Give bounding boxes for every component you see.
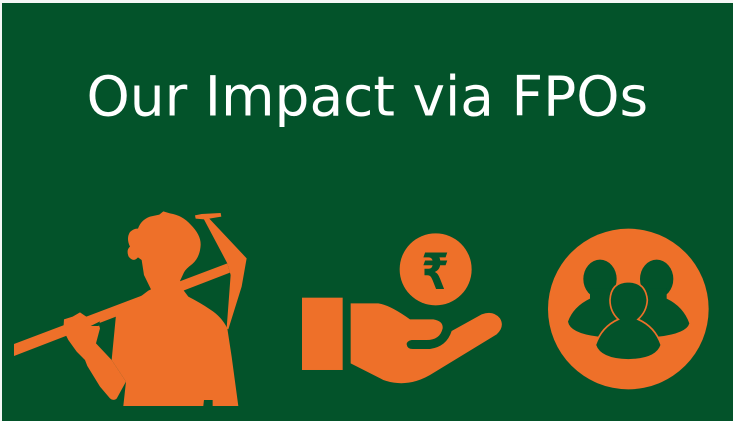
icon: hand receiving a rupee coin [302,233,502,383]
gap between fingers and handle [91,321,100,326]
title: Our Impact via FPOs [86,64,648,128]
person: centre [595,282,661,360]
person: left [568,260,627,337]
sleeve cuff [302,298,343,370]
person: right [630,260,689,337]
orange circle [548,229,709,389]
rupee symbol: ₹ [421,243,449,301]
icon: farmer carrying a pickaxe [14,211,247,406]
pickaxe handle [14,263,230,356]
farmer arm and hand [63,312,126,400]
rupee coin [400,233,472,305]
farmer head and torso [112,211,238,406]
pickaxe head [195,213,247,329]
icon: group of three people in a circle [548,229,709,389]
open hand [351,303,502,383]
